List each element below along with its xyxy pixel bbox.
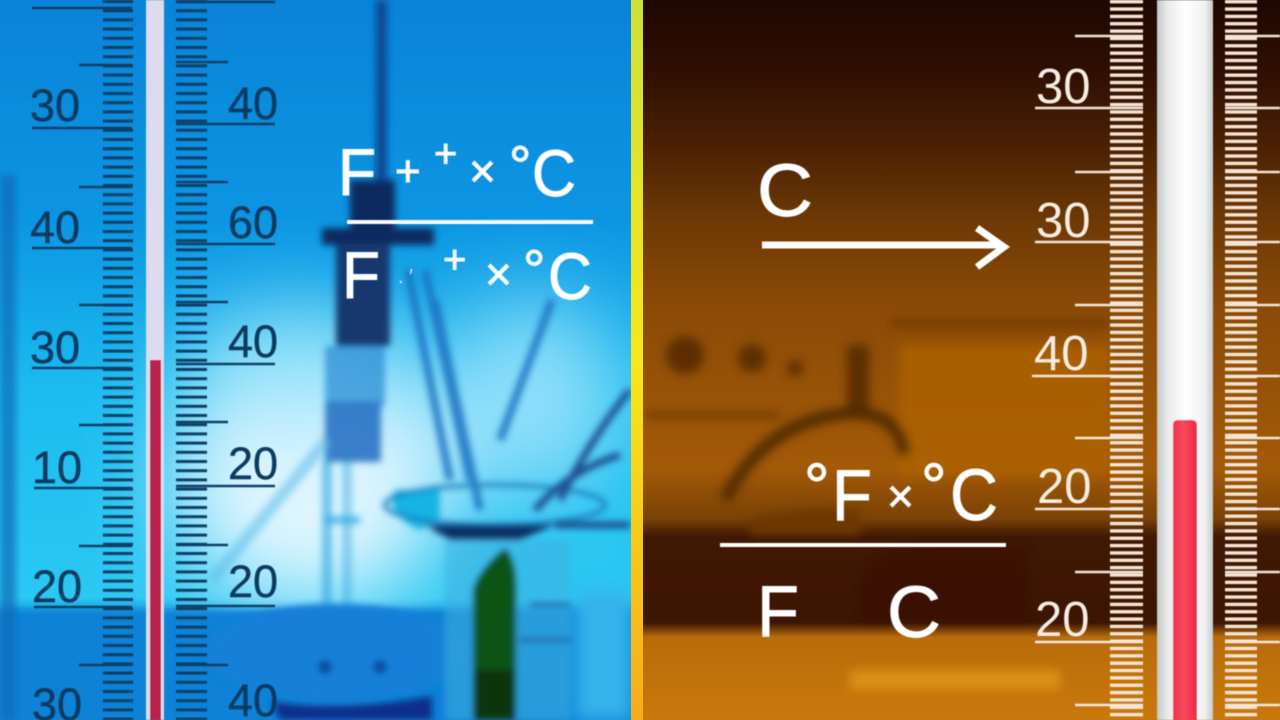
label: C: C (757, 149, 813, 232)
formula denominator: F (342, 238, 380, 312)
formula numerator: + (395, 147, 421, 196)
formula numerator: F (832, 456, 872, 536)
thermometer: blue side (30, 0, 278, 720)
scale ticks: inner right (1225, 0, 1280, 720)
scale labels: amber side: 30 (1036, 194, 1091, 248)
formula numerator: ° (804, 450, 830, 522)
scale ticks: right (176, 0, 275, 720)
formula denominator: . ′ (398, 266, 413, 288)
fraction bar (347, 220, 593, 224)
formula numerator: × (469, 145, 496, 197)
flask and lab glassware (blurred photo background) (205, 0, 630, 720)
formula denominator: F (757, 572, 799, 652)
scale ticks: left (32, 0, 133, 720)
formula denominator: ° (523, 238, 545, 301)
lab table band (0, 610, 632, 720)
scale labels: left: 10 (32, 442, 82, 493)
formula numerator: C (532, 136, 576, 210)
scale labels: right: 60 (228, 197, 278, 248)
tube: mercury column (146, 0, 164, 720)
formula: amber side (720, 149, 1006, 653)
scale labels: right: 40 (228, 78, 278, 129)
scale labels: amber side: 20 (1035, 593, 1090, 647)
scale labels: right: 20 (228, 556, 278, 607)
formula numerator: C (950, 456, 998, 536)
scale labels: left (30, 80, 82, 720)
formula numerator (338, 132, 576, 210)
thermometer: amber side (1032, 0, 1280, 720)
scale labels: left: 40 (30, 202, 80, 253)
scale labels: amber side: 20 (1037, 460, 1092, 514)
scale ticks: inner left (1032, 0, 1143, 720)
scale labels: amber side: 30 (1036, 60, 1091, 114)
scale labels: amber side: 40 (1034, 327, 1089, 381)
panel: amber warm laboratory side (643, 0, 1280, 720)
formula denominator (757, 572, 941, 653)
scale labels: left: 30 (30, 322, 80, 373)
lab bench silhouette (blurred photo background) (645, 318, 1110, 690)
divider: yellow strip (631, 0, 643, 720)
scale labels: amber side (1034, 60, 1092, 647)
scale labels: right: 40 (228, 316, 278, 367)
formula numerator: ° (921, 450, 947, 522)
tube: white glass with red column (1157, 0, 1213, 720)
arrow pointing to the scale (762, 228, 1004, 267)
formula denominator: × (485, 248, 512, 300)
formula denominator: C (887, 573, 941, 653)
formula denominator: C (548, 239, 592, 313)
scale labels: left: 30 (30, 80, 80, 131)
formula denominator (342, 238, 592, 313)
formula: blue side (338, 132, 593, 313)
formula denominator: + (443, 238, 466, 282)
formula numerator: + (434, 132, 457, 176)
scale labels: right (228, 78, 278, 720)
scale labels: left: 20 (32, 561, 82, 612)
formula numerator: F (338, 135, 376, 209)
formula numerator (804, 450, 998, 536)
formula numerator: × (887, 470, 914, 522)
light glow behind glassware (170, 300, 620, 610)
fraction bar (720, 543, 1006, 547)
panel: blue cold laboratory side (0, 0, 632, 720)
formula numerator: ° (509, 134, 531, 197)
scale labels: right: 20 (228, 438, 278, 489)
